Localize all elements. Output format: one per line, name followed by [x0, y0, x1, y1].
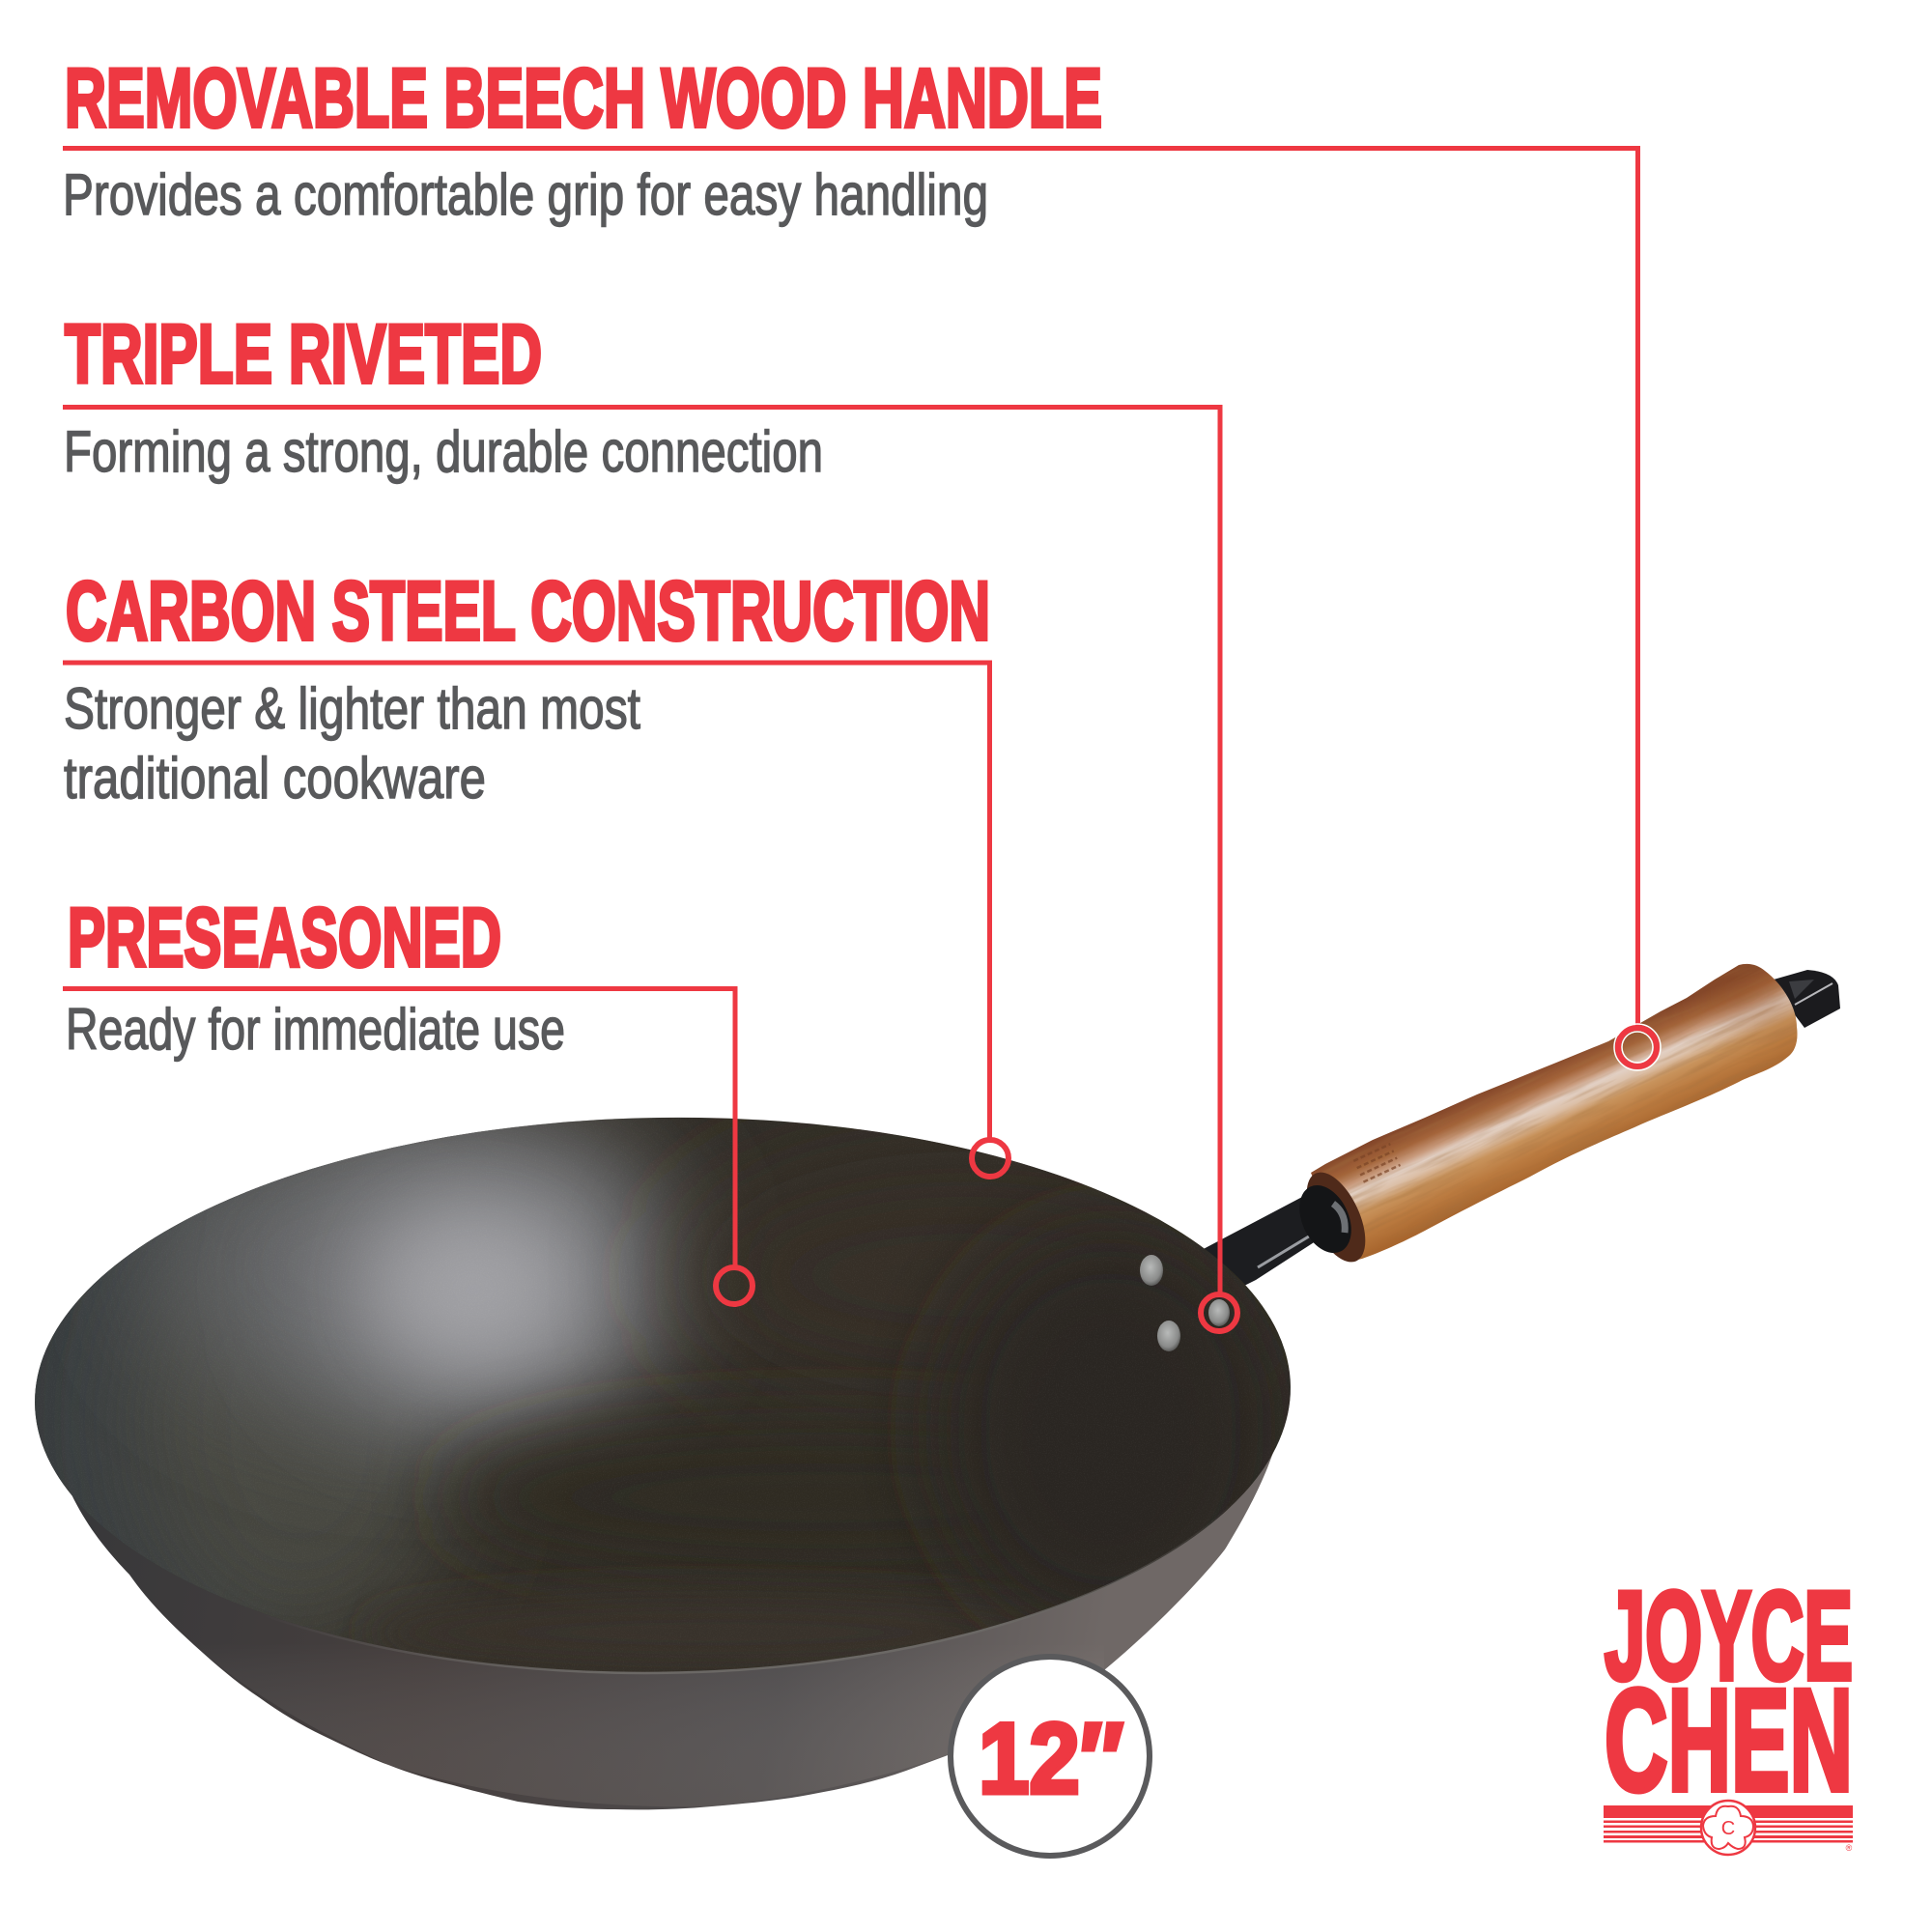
description: Forming a strong, durable connection: [64, 419, 823, 484]
wok interior: [35, 1117, 1291, 1672]
marker ring: [972, 1140, 1009, 1177]
handle end loop: [1774, 970, 1840, 1028]
heading: PRESEASONED: [68, 892, 501, 984]
leader line: [63, 663, 989, 1138]
description: Stronger & lighter than most: [64, 676, 640, 741]
registered mark: ®: [1846, 1843, 1853, 1853]
logo flower emblem: [1701, 1801, 1755, 1855]
leader line: [63, 408, 1220, 1293]
description: traditional cookware: [64, 746, 486, 810]
logo stripes: [1604, 1805, 1853, 1843]
description: Ready for immediate use: [66, 997, 565, 1062]
callout: removable beech wood handle: [63, 52, 1661, 1070]
marker ring: [716, 1267, 753, 1304]
exterior lower sheen: [194, 1584, 1104, 1806]
description: [64, 676, 640, 810]
handle collar: [1290, 1177, 1361, 1262]
logo flower emblem: C: [1721, 1818, 1735, 1839]
handle end face: [1294, 1164, 1378, 1270]
logo wordmark: [1605, 1565, 1853, 1821]
heading: TRIPLE RIVETED: [65, 308, 542, 401]
callout: triple riveted: [63, 308, 1237, 1331]
callout: carbon steel construction: [63, 565, 1009, 1177]
marker ring: [1201, 1294, 1237, 1331]
wood stamp: [1353, 1144, 1401, 1182]
wooden handle: [1306, 964, 1797, 1262]
wok handle shaft: [1198, 1196, 1338, 1294]
wok front rim highlight: [259, 1490, 1246, 1673]
wok photo: [0, 893, 1853, 1809]
leader line: [63, 149, 1638, 1026]
brand logo: [1604, 1565, 1853, 1855]
marker ring: [1614, 1024, 1661, 1070]
leader line: [63, 989, 735, 1266]
size badge: [951, 1657, 1150, 1856]
wok exterior body: [58, 1391, 1280, 1809]
heading: CARBON STEEL CONSTRUCTION: [66, 565, 990, 658]
rivets: [1140, 1255, 1230, 1351]
description: Provides a comfortable grip for easy handling: [63, 162, 988, 227]
callout: preseasoned: [63, 892, 753, 1304]
heading: REMOVABLE BEECH WOOD HANDLE: [65, 52, 1102, 145]
size label: 12″: [979, 1703, 1123, 1815]
